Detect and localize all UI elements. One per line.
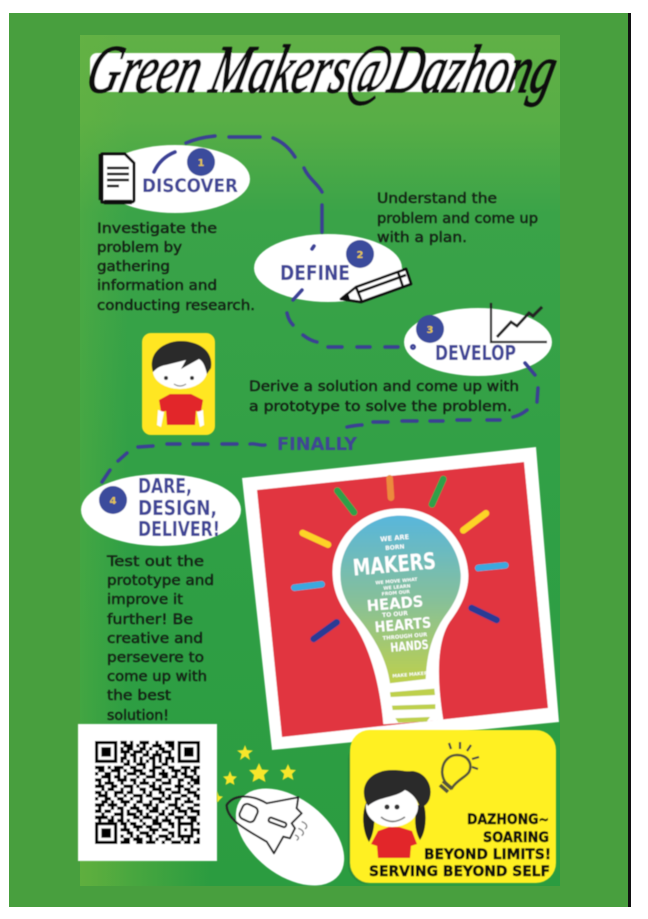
heading: dare design deliver: DESIGN, — [138, 496, 217, 520]
boy hair — [152, 341, 211, 374]
text: step 4 description: Test out the — [106, 554, 204, 570]
text: discover description — [97, 221, 255, 314]
icon: line chart — [491, 303, 547, 342]
number badge 2: 2 — [357, 250, 364, 261]
bulb text: WE ARE — [380, 533, 410, 543]
bulb text: MAKE MAKER — [392, 671, 428, 680]
girl hair — [364, 770, 431, 808]
rocket illustration — [218, 769, 362, 905]
bulb text: MAKERS — [352, 548, 437, 582]
heading: dare design deliver — [138, 474, 220, 541]
boy face — [153, 353, 207, 389]
text: discover description: Investigate the — [97, 221, 217, 237]
QR code — [78, 724, 217, 861]
icon: pencil — [341, 269, 411, 302]
text: define description: Understand the — [377, 191, 497, 207]
bulb text — [350, 531, 446, 682]
text: define description: problem and come up — [377, 211, 538, 227]
bulb text: THROUGH OUR — [382, 632, 428, 642]
text: define description — [377, 191, 538, 246]
bulb text: TO OUR — [382, 610, 409, 619]
step 1: discover — [100, 145, 250, 213]
number badge 4 — [99, 486, 127, 514]
step 2: define — [254, 234, 411, 302]
number badge 4: 4 — [110, 496, 117, 507]
girl face — [366, 787, 418, 827]
text: develop description: Derive a solution and come up with — [249, 379, 519, 395]
inner gradient panel — [80, 35, 560, 886]
text: define description: with a plan. — [377, 230, 467, 246]
text: discover description: gathering — [97, 259, 170, 275]
icon: rocket — [227, 797, 307, 853]
icon: small light bulb — [440, 742, 479, 792]
boy character card — [142, 333, 215, 435]
stars — [217, 745, 296, 802]
heading: discover: DISCOVER — [142, 176, 238, 197]
dashed journey path — [102, 136, 538, 482]
bulb text: BORN — [385, 543, 405, 552]
poster: light bulb — [242, 447, 559, 750]
girl character card with slogan — [348, 730, 556, 884]
slogan: SERVING BEYOND SELF — [369, 864, 550, 880]
bulb text: HEADS — [366, 592, 424, 615]
heading: dare design deliver: DELIVER! — [138, 517, 220, 541]
text: discover description: information and — [97, 278, 217, 294]
text: step 4 description: further! Be — [107, 612, 193, 628]
heading: develop: DEVELOP — [435, 341, 516, 365]
bulb text: HANDS — [390, 637, 429, 655]
boy arms — [157, 410, 204, 427]
slogan: BEYOND LIMITS! — [424, 847, 551, 863]
text: step 4 description: come up with — [107, 669, 207, 685]
step 3: develop — [404, 303, 552, 376]
text: discover description: problem by — [97, 240, 182, 256]
text: step 4 description: solution! — [107, 708, 169, 724]
step 4: dare, design, deliver — [81, 474, 241, 546]
number badge 1 — [187, 148, 215, 176]
text: step 4 description: prototype and — [107, 573, 214, 589]
heading: define: DEFINE — [280, 261, 350, 285]
number badge 3 — [416, 315, 444, 343]
bulb base bands — [390, 689, 435, 723]
number badge 1: 1 — [198, 158, 205, 169]
bulb text: HEARTS — [374, 614, 432, 636]
bulb glass — [340, 516, 461, 683]
text: develop description: a prototype to solve the problem. — [249, 399, 512, 415]
text: step 4 description: the best — [107, 688, 172, 704]
text: step 4 description: persevere to — [107, 650, 204, 666]
bulb text: WE LEARN — [383, 583, 411, 592]
girl shirt — [371, 827, 417, 858]
text: step 4 description: creative and — [107, 631, 203, 647]
text: develop description — [249, 379, 519, 415]
slogan: SOARING — [483, 830, 549, 846]
number badge 2 — [346, 240, 374, 268]
right black edge line — [628, 13, 631, 907]
girl braids — [363, 803, 426, 842]
text: discover description: conducting research. — [97, 298, 255, 314]
heading: dare design deliver: DARE, — [138, 474, 192, 498]
bulb text: WE MOVE WHAT — [375, 577, 419, 586]
boy shirt — [159, 394, 203, 425]
text: step 4 description — [106, 554, 214, 724]
icon: document — [101, 154, 134, 202]
text: step 4 description: improve it — [107, 592, 184, 608]
bulb rays — [294, 478, 505, 639]
number badge 3: 3 — [427, 325, 434, 336]
slogan: DAZHONG~ — [467, 812, 549, 828]
slogan — [369, 812, 551, 880]
label: finally: FINALLY — [277, 434, 358, 455]
bulb outline — [333, 508, 468, 724]
bulb text: FROM OUR — [381, 589, 411, 598]
